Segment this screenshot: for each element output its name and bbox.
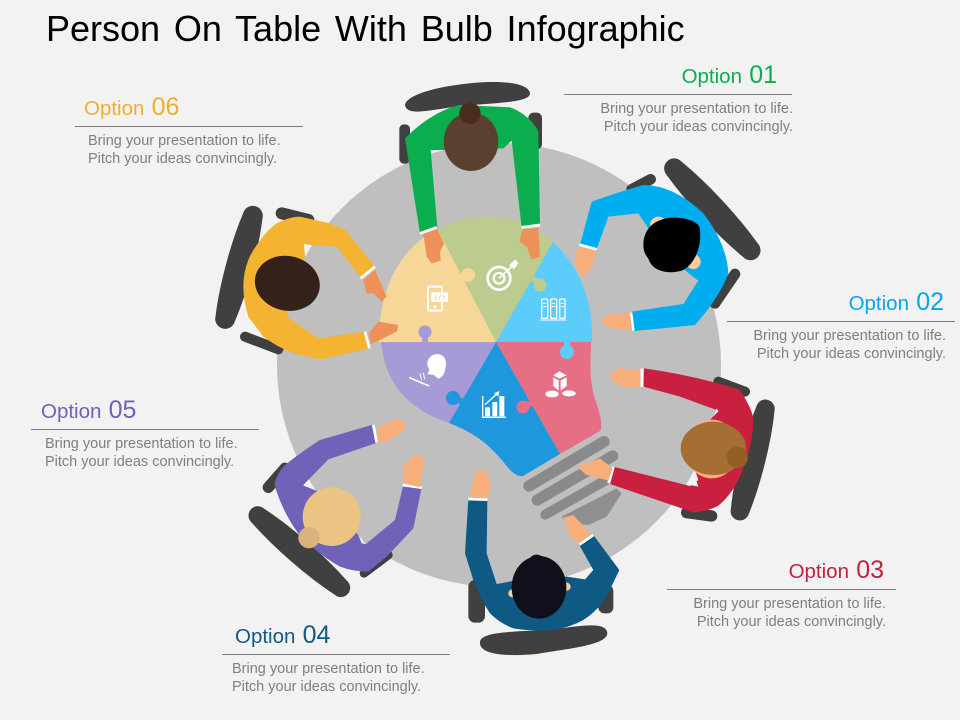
segment: green — [438, 217, 553, 342]
chair — [687, 382, 780, 523]
icon: head silhouette — [409, 354, 446, 386]
cuffs — [609, 369, 642, 483]
body — [610, 368, 753, 512]
person: red — [577, 368, 780, 523]
person: blue — [575, 152, 767, 331]
white gap — [304, 244, 311, 257]
heading: Option 03 — [789, 556, 884, 584]
head — [681, 422, 746, 475]
body text: Bring your presentation to life. — [600, 101, 793, 117]
body text: Bring your presentation to life. — [45, 436, 238, 452]
chair — [632, 152, 767, 303]
chair — [242, 468, 388, 603]
hands — [423, 229, 444, 263]
hair bun — [298, 527, 320, 548]
body text: Bring your presentation to life. — [693, 596, 886, 612]
heading: Option 04 — [235, 621, 331, 649]
ears — [508, 589, 516, 597]
body — [465, 499, 619, 631]
chair — [468, 580, 613, 655]
heading: Option 01 — [682, 61, 777, 89]
body — [405, 105, 540, 233]
divider — [75, 126, 303, 128]
body text: Pitch your ideas convincingly. — [88, 151, 277, 167]
body text: Bring your presentation to life. — [88, 133, 281, 149]
segment: light blue — [496, 242, 592, 342]
body text: Bring your presentation to life. — [753, 328, 946, 344]
person: green — [399, 82, 542, 263]
head — [643, 218, 700, 272]
icon: target — [488, 259, 518, 290]
callout: option 04 — [222, 621, 450, 695]
callout: option 06 — [75, 93, 303, 167]
body text: Pitch your ideas convincingly. — [697, 614, 886, 630]
head — [303, 487, 361, 546]
person: purple — [242, 418, 424, 603]
white gaps — [687, 408, 718, 487]
callout: option 01 — [564, 61, 793, 135]
skin — [685, 420, 738, 478]
hands — [609, 368, 640, 388]
segment: purple — [381, 342, 496, 423]
callout: option 02 — [727, 288, 955, 362]
white gaps — [303, 480, 367, 544]
chair — [210, 203, 308, 349]
body — [580, 185, 728, 331]
hands — [575, 247, 596, 278]
cuffs — [579, 245, 633, 331]
title: Person On Table With Bulb Infographic — [46, 8, 685, 49]
person: navy — [465, 470, 619, 655]
chair — [399, 82, 542, 164]
segment: yellow — [379, 230, 496, 342]
tab: yellow into green — [459, 275, 468, 281]
tab: red into blue — [523, 401, 535, 407]
body text: Bring your presentation to life. — [232, 661, 425, 677]
callout: option 05 — [31, 396, 259, 470]
divider — [222, 654, 450, 656]
icon: bar chart — [483, 391, 506, 417]
icon: file binders — [540, 299, 567, 320]
body text: Pitch your ideas convincingly. — [757, 346, 946, 362]
body — [275, 425, 422, 572]
divider — [564, 94, 792, 96]
person: yellow — [210, 203, 398, 359]
body text: Pitch your ideas convincingly. — [604, 119, 793, 135]
segment: red — [496, 342, 601, 454]
cuffs — [420, 225, 540, 233]
hair tuft — [528, 555, 545, 572]
heading: Option 06 — [84, 93, 179, 121]
icon: mobile code — [428, 287, 448, 311]
body — [243, 217, 375, 359]
tab: purple into yellow — [422, 332, 428, 344]
divider — [667, 588, 896, 590]
hands — [378, 418, 407, 442]
hair bun — [727, 447, 748, 468]
body text: Pitch your ideas convincingly. — [45, 454, 234, 470]
heading: Option 02 — [849, 288, 944, 316]
heading: Option 05 — [41, 396, 136, 424]
tab: green into light blue — [530, 276, 540, 285]
cuffs — [468, 499, 593, 545]
cuffs — [373, 425, 422, 488]
ears — [650, 217, 667, 233]
hands — [363, 270, 387, 302]
cuffs — [361, 267, 375, 348]
tab: blue into purple — [453, 398, 464, 402]
hands — [470, 470, 491, 497]
body text: Pitch your ideas convincingly. — [232, 679, 421, 695]
head — [444, 112, 498, 171]
divider — [31, 428, 259, 430]
table — [277, 143, 721, 587]
head — [250, 250, 325, 317]
callout: option 03 — [667, 556, 896, 630]
head — [512, 556, 566, 619]
segment: blue — [449, 342, 560, 476]
bulb puzzle — [379, 217, 601, 476]
laptop keyboard — [529, 442, 622, 525]
divider — [727, 320, 955, 322]
hair bun — [459, 103, 481, 124]
icon: cube and hands — [545, 371, 576, 397]
tab: light blue into red — [564, 340, 570, 352]
